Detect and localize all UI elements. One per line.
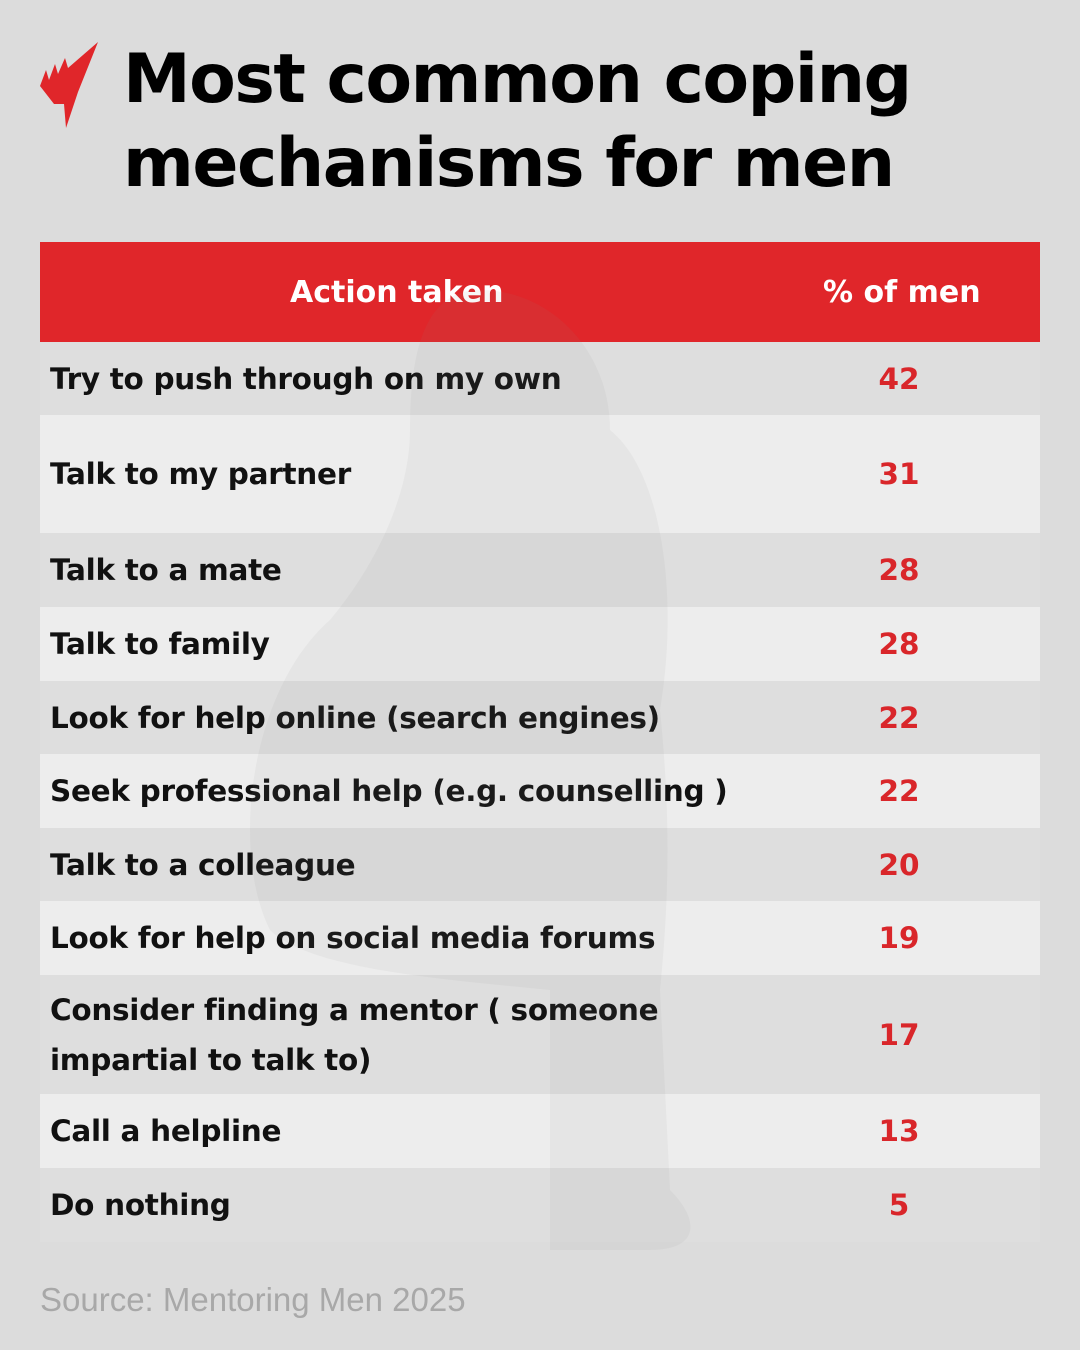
row 5: 22 xyxy=(878,700,920,734)
row 6 xyxy=(40,754,1040,828)
title xyxy=(123,40,911,203)
table xyxy=(40,242,1040,1222)
row 5 xyxy=(40,681,1040,754)
row 6: 22 xyxy=(878,774,920,808)
row 6: Seek professional help (e.g. counselling ) xyxy=(50,774,727,808)
row 9 xyxy=(40,975,1040,1094)
row 9: Consider finding a mentor ( someone xyxy=(50,992,658,1026)
row 4 xyxy=(40,607,1040,681)
row 11 xyxy=(40,1168,1040,1242)
row 10: Call a helpline xyxy=(50,1114,281,1148)
header row xyxy=(40,242,1040,342)
row 9: impartial to talk to) xyxy=(50,1042,371,1076)
row 11: Do nothing xyxy=(50,1188,231,1222)
row 1: 42 xyxy=(878,362,920,396)
source: Source: Mentoring Men 2025 xyxy=(40,1281,466,1318)
title: mechanisms for men xyxy=(123,124,894,203)
row 4: Talk to family xyxy=(50,627,270,661)
row 8: Look for help on social media forums xyxy=(50,921,655,955)
row 3 xyxy=(40,533,1040,607)
silhouette xyxy=(251,290,666,1020)
title: Most common coping xyxy=(123,40,911,119)
row 11: 5 xyxy=(889,1188,909,1222)
row 7: Talk to a colleague xyxy=(50,848,355,882)
row 7 xyxy=(40,828,1040,901)
header row: Action taken xyxy=(290,275,503,310)
row 3: 28 xyxy=(878,553,920,587)
icon: logo xyxy=(40,42,98,128)
row 8: 19 xyxy=(878,921,920,955)
row 9: 17 xyxy=(878,1018,920,1052)
row 1 xyxy=(40,342,1040,415)
row 2: Talk to my partner xyxy=(50,457,351,491)
row 4: 28 xyxy=(878,627,920,661)
row 1: Try to push through on my own xyxy=(50,362,561,396)
row 8 xyxy=(40,901,1040,975)
row 10 xyxy=(40,1094,1040,1168)
row 10: 13 xyxy=(878,1114,920,1148)
row 3: Talk to a mate xyxy=(50,553,282,587)
row 5: Look for help online (search engines) xyxy=(50,700,660,734)
row 7: 20 xyxy=(878,848,920,882)
row 2 xyxy=(40,415,1040,533)
header row: % of men xyxy=(823,275,981,310)
row 2: 31 xyxy=(878,457,920,491)
